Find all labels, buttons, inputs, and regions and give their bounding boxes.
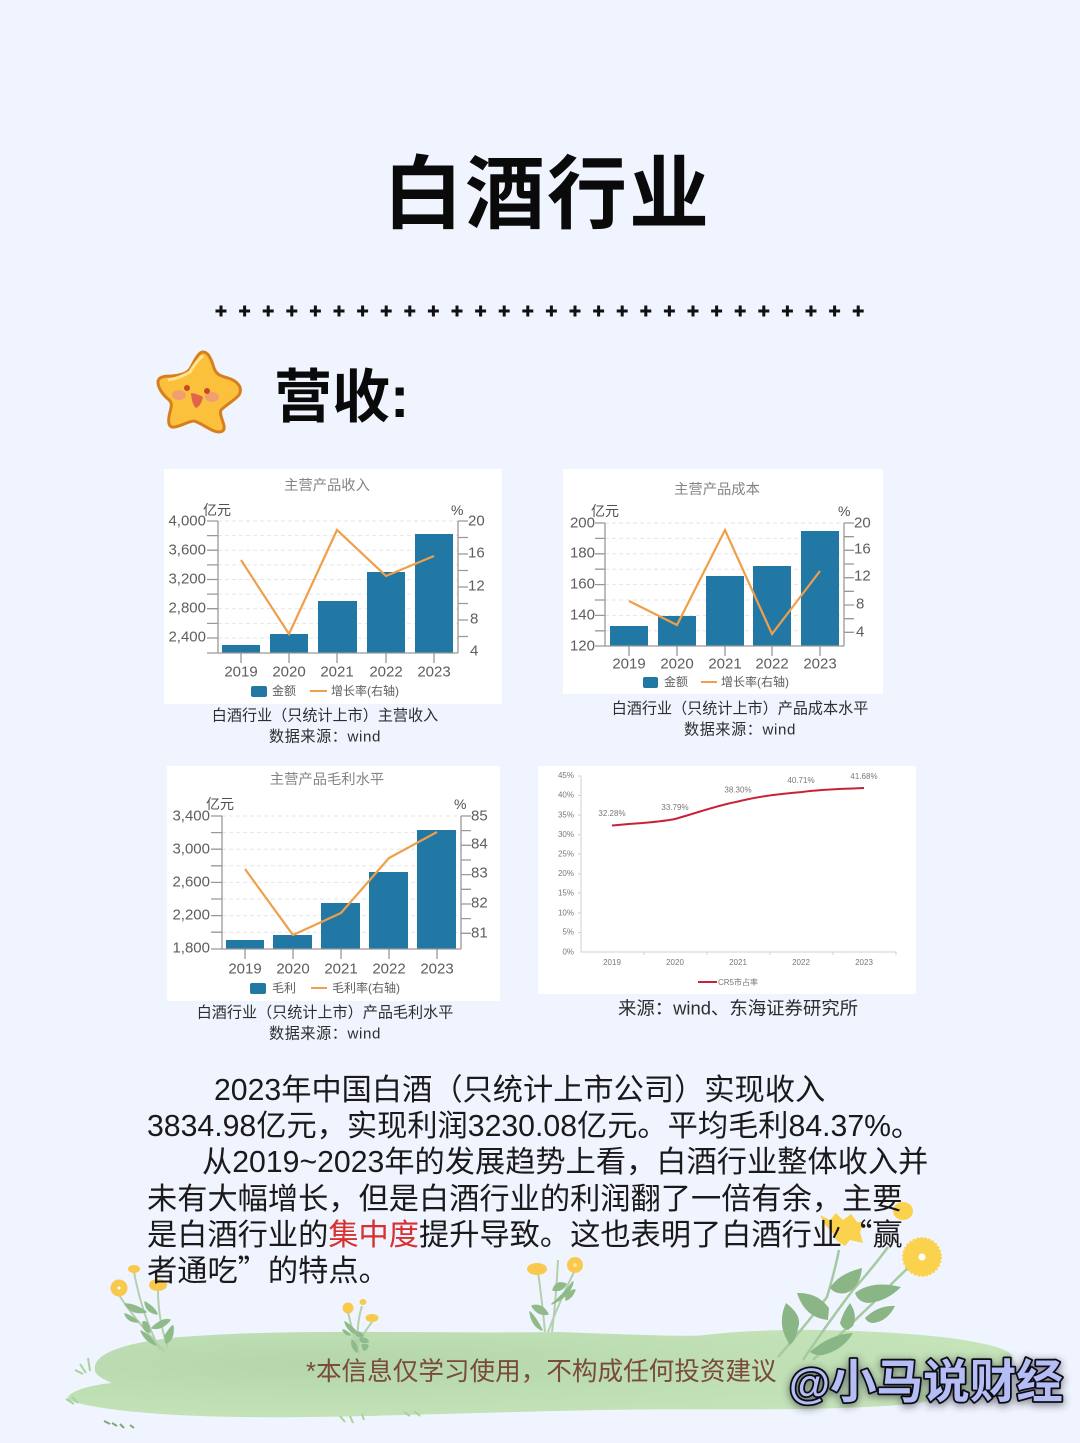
caption: cost chart bbox=[612, 700, 868, 738]
axis labels: revenue: 4 bbox=[470, 642, 478, 660]
axis labels: CR5 share: 15% bbox=[558, 888, 574, 898]
axis labels: CR5 share: 2021 bbox=[729, 958, 747, 967]
chart title: gross profit: 主营产品毛利水平 bbox=[270, 771, 384, 788]
legend: revenue bbox=[251, 683, 399, 698]
legend: CR5 share bbox=[698, 977, 758, 987]
axis labels: CR5 share: 2020 bbox=[666, 958, 684, 967]
axis labels: gross profit: 1,800 bbox=[172, 940, 210, 956]
line: revenue growth bbox=[241, 530, 434, 634]
axis labels: revenue: 2022 bbox=[369, 664, 403, 680]
grass meadow bbox=[66, 1330, 1013, 1428]
plus-sign divider bbox=[216, 310, 866, 312]
body text: 是白酒行业的集中度提升导致。这也表明了白酒行业“赢 bbox=[147, 1210, 903, 1254]
axis labels: gross profit: 3,000 bbox=[172, 840, 210, 858]
chart title: revenue: 主营产品收入 bbox=[284, 477, 370, 494]
caption: revenue chart: 白酒行业（只统计上市）主营收入 bbox=[212, 708, 438, 724]
axis labels: cost: 20 bbox=[854, 514, 871, 532]
axis labels: gross profit: 2022 bbox=[372, 960, 406, 978]
axis labels: gross profit: 2023 bbox=[420, 960, 454, 978]
axis labels: gross profit: 2,200 bbox=[172, 906, 210, 924]
axis labels: cost bbox=[570, 503, 871, 672]
axis labels: CR5 share: 35% bbox=[558, 810, 574, 820]
caption: cost chart: 数据来源：wind bbox=[684, 722, 796, 738]
axis labels: CR5 share: 25% bbox=[558, 850, 574, 858]
axis labels: cost: 200 bbox=[570, 514, 595, 532]
line: cost growth bbox=[629, 530, 820, 634]
axis labels: gross profit: 81 bbox=[471, 924, 488, 942]
axis labels: cost: % bbox=[838, 503, 850, 519]
plant: centre yellow flowers bbox=[342, 1299, 378, 1355]
axis labels: revenue: 4,000 bbox=[168, 512, 206, 530]
axis labels: CR5 share: 45% bbox=[558, 771, 574, 780]
axis labels: revenue: 2019 bbox=[224, 664, 258, 680]
icon: smiling star bbox=[158, 352, 240, 432]
watermark: @小马说财经 bbox=[789, 1356, 1063, 1408]
body text bbox=[147, 1073, 928, 1290]
body text: 从2019~2023年的发展趋势上看，白酒行业整体收入并 bbox=[202, 1145, 928, 1179]
legend: cost: 金额 bbox=[664, 674, 688, 689]
legend: CR5 share: CR5市占率 bbox=[718, 977, 758, 987]
axis labels: revenue: % bbox=[451, 502, 463, 518]
bars: gross profit bbox=[226, 830, 456, 949]
axis labels: gross profit: 83 bbox=[471, 864, 488, 882]
chart title: cost: 主营产品成本 bbox=[674, 481, 760, 498]
bars: revenue bbox=[222, 534, 453, 653]
axis labels: CR5 share: 2019 bbox=[603, 958, 621, 967]
axis labels: cost: 140 bbox=[570, 606, 595, 624]
caption: gross profit chart: 数据来源：wind bbox=[269, 1026, 381, 1042]
legend: gross profit bbox=[250, 980, 400, 995]
axis labels: revenue: 亿元 bbox=[203, 502, 231, 518]
axis labels: revenue: 8 bbox=[470, 610, 478, 628]
axis labels: gross profit: % bbox=[454, 796, 466, 812]
axis labels: revenue bbox=[168, 502, 485, 680]
axis labels: cost: 2023 bbox=[803, 656, 837, 672]
data labels: CR5 share: 41.68% bbox=[850, 772, 878, 781]
axis labels: CR5 share: 20% bbox=[558, 869, 574, 878]
data labels: CR5 share bbox=[598, 772, 878, 818]
axis labels: gross profit: 84 bbox=[471, 836, 488, 852]
axis labels: CR5 share: 10% bbox=[558, 908, 574, 918]
data labels: CR5 share: 38.30% bbox=[724, 786, 752, 794]
body text: 2023年中国白酒（只统计上市公司）实现收入 bbox=[214, 1073, 825, 1107]
axis labels: gross profit: 2,600 bbox=[172, 874, 210, 890]
body text: 3834.98亿元，实现利润3230.08亿元。平均毛利84.37%。 bbox=[147, 1109, 921, 1143]
data labels: CR5 share: 32.28% bbox=[598, 809, 626, 818]
axis labels: gross profit: 3,400 bbox=[172, 808, 210, 824]
line: CR5 share bbox=[612, 788, 864, 826]
axis labels: gross profit: 2021 bbox=[324, 960, 358, 978]
axis labels: revenue: 2023 bbox=[417, 664, 451, 680]
body text: 未有大幅增长，但是白酒行业的利润翻了一倍有余，主要 bbox=[147, 1182, 902, 1216]
axis labels: cost: 2020 bbox=[660, 656, 694, 672]
caption: cost chart: 白酒行业（只统计上市）产品成本水平 bbox=[612, 700, 868, 718]
axis labels: CR5 share: 2022 bbox=[792, 958, 810, 967]
legend: revenue: 增长率(右轴) bbox=[331, 683, 399, 698]
axis labels: cost: 4 bbox=[856, 624, 864, 640]
axis labels: cost: 16 bbox=[854, 540, 871, 558]
axis labels: revenue: 12 bbox=[468, 578, 485, 594]
plant: large right flowers bbox=[778, 1202, 941, 1360]
axis labels: revenue: 16 bbox=[468, 544, 485, 562]
axis labels: gross profit: 亿元 bbox=[206, 796, 234, 812]
caption: gross profit chart bbox=[197, 1004, 453, 1042]
axis labels: gross profit bbox=[172, 796, 488, 978]
axis labels: revenue: 2021 bbox=[320, 664, 354, 680]
panel: CR5 share chart bbox=[538, 766, 916, 994]
caption: revenue chart bbox=[212, 708, 438, 746]
watermark: @小马说财经 bbox=[789, 1358, 1063, 1410]
legend: gross profit: 毛利 bbox=[272, 981, 296, 995]
legend: cost bbox=[643, 674, 789, 689]
data labels: CR5 share: 33.79% bbox=[661, 803, 689, 812]
axis labels: cost: 8 bbox=[856, 596, 864, 612]
disclaimer: *本信息仅学习使用，不构成任何投资建议 bbox=[306, 1357, 777, 1386]
axis labels: gross profit: 82 bbox=[471, 894, 488, 912]
axis labels: cost: 180 bbox=[570, 544, 595, 562]
axis labels: cost: 2019 bbox=[612, 656, 646, 672]
panel: cost chart bbox=[563, 469, 883, 694]
legend: revenue: 金额 bbox=[272, 683, 296, 698]
axis labels: CR5 share: 40% bbox=[558, 790, 574, 800]
data labels: CR5 share: 40.71% bbox=[787, 776, 815, 785]
axis labels: revenue: 2,400 bbox=[168, 628, 206, 646]
legend: cost: 增长率(右轴) bbox=[721, 674, 789, 689]
axis labels: revenue: 3,600 bbox=[168, 542, 206, 558]
caption: CR5 share chart: 来源：wind、东海证券研究所 bbox=[618, 998, 858, 1018]
axis labels: cost: 亿元 bbox=[591, 503, 619, 519]
axis labels: gross profit: 85 bbox=[471, 808, 488, 824]
caption: gross profit chart: 白酒行业（只统计上市）产品毛利水平 bbox=[197, 1004, 453, 1022]
axis labels: CR5 share: 30% bbox=[558, 830, 574, 839]
bars: cost bbox=[610, 531, 839, 646]
panel: gross profit chart bbox=[167, 766, 500, 1001]
title: 白酒行业 bbox=[383, 150, 711, 239]
axis labels: revenue: 20 bbox=[468, 512, 485, 530]
axis labels: cost: 2022 bbox=[755, 656, 789, 672]
body text: 者通吃”的特点。 bbox=[147, 1246, 389, 1290]
heading: revenue: 营收: bbox=[274, 365, 409, 430]
panel: revenue chart bbox=[164, 469, 502, 704]
axis labels: CR5 share bbox=[558, 771, 873, 967]
plant: middle yellow flowers bbox=[527, 1257, 583, 1332]
axis labels: revenue: 2020 bbox=[272, 664, 306, 680]
legend: gross profit: 毛利率(右轴) bbox=[332, 980, 400, 995]
axis labels: cost: 120 bbox=[570, 638, 595, 654]
axis labels: cost: 12 bbox=[854, 568, 871, 584]
plant: left yellow flowers bbox=[110, 1265, 173, 1352]
axis labels: CR5 share: 5% bbox=[562, 928, 574, 936]
axis labels: revenue: 3,200 bbox=[168, 570, 206, 588]
axis labels: revenue: 2,800 bbox=[168, 600, 206, 616]
axis labels: gross profit: 2020 bbox=[276, 960, 310, 978]
axis labels: gross profit: 2019 bbox=[228, 960, 262, 978]
axis labels: cost: 160 bbox=[570, 576, 595, 592]
caption: revenue chart: 数据来源：wind bbox=[269, 728, 381, 746]
axis labels: CR5 share: 0% bbox=[562, 948, 574, 956]
line: gross margin bbox=[245, 832, 437, 935]
axis labels: cost: 2021 bbox=[708, 656, 742, 672]
axis labels: CR5 share: 2023 bbox=[855, 958, 873, 967]
